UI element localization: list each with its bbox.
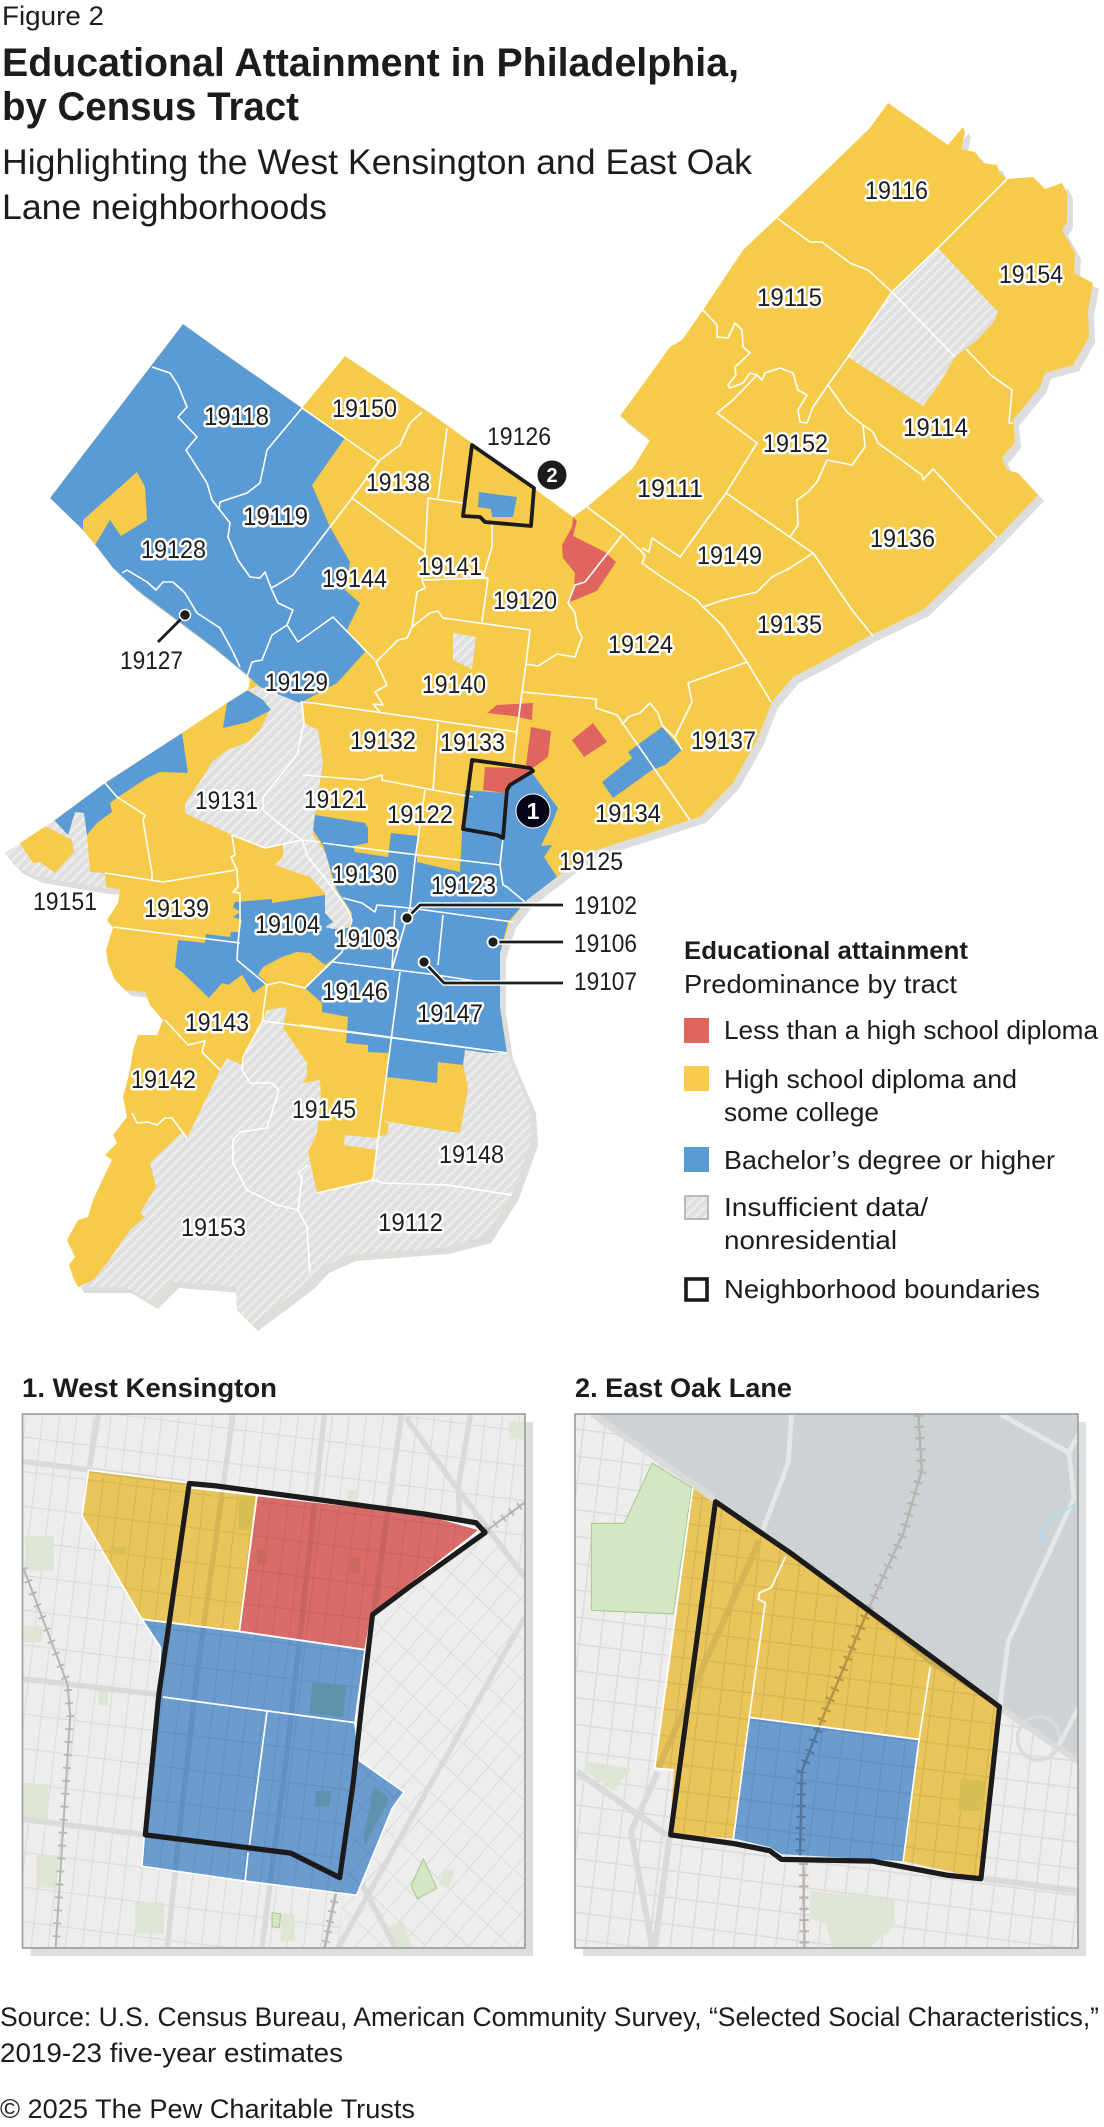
badge 2 [537,460,567,490]
ZIP code labels: 19119 [243,503,308,531]
inset tract: yellow [82,1470,257,1631]
tract fills clipped to the city [5,248,998,1325]
city base: high school diploma and some college tracts [5,103,1093,1325]
ZIP code labels: 19140 [422,671,486,699]
ZIP code labels: 19106 [574,930,637,958]
ZIP code labels: 19126 [487,423,551,451]
ZIP code labels [33,177,1063,1242]
neighborhood outline: East Oak Lane [463,445,534,526]
subtitle [2,143,753,227]
ZIP code labels: 19147 [417,1000,483,1028]
legend heading: Educational attainment [684,937,969,965]
ZIP code labels: 19122 [387,801,453,829]
tract boundaries [105,179,1013,1273]
figure number: Figure 2 [2,1,104,31]
less than a high school diploma tracts [483,517,616,793]
inset tract: yellow [655,1488,1000,1879]
ZIP code labels: 19111 [637,475,703,503]
ZIP code labels: 19143 [185,1009,249,1037]
ZIP code labels: 19137 [691,727,756,755]
source note: Source: U.S. Census Bureau, American Community Survey, “Selected Social Characteristics,” [0,2002,1099,2032]
yellow pocket in 19128 [83,472,147,545]
neighborhood outline: West Kensington [463,760,533,838]
legend item: high school [684,1064,1017,1127]
callout: 19102 [402,905,563,924]
inset neighborhood outline [145,1483,485,1878]
ZIP code labels: 19154 [999,261,1063,289]
ZIP code labels: 19129 [265,669,328,697]
ZIP code labels: 19115 [757,284,822,312]
bachelor's degree tracts [50,324,682,1083]
inset tracts: blue [142,1619,404,1895]
ZIP code labels: 19141 [418,553,482,581]
badge 1: 1 [527,798,540,824]
panel: West Kensington inset map [22,1414,533,1956]
ZIP code labels: 19153 [181,1214,246,1242]
legend [684,937,1099,1304]
ZIP code labels: 19149 [697,542,762,570]
ZIP code labels: 19151 [33,888,97,916]
legend item: insufficient data: Insufficient data/ [724,1192,929,1222]
legend subheading: Predominance by tract [684,969,958,999]
legend item: less than high school: Less than a high school diploma [724,1015,1099,1045]
title: by Census Tract [2,85,299,129]
ZIP code labels: 19123 [431,872,496,900]
ZIP code labels: 19120 [493,587,557,615]
ZIP code labels: 19142 [131,1066,196,1094]
ZIP code labels: 19148 [439,1141,504,1169]
ZIP code labels: 19104 [255,911,320,939]
ZIP code labels: 19135 [757,611,822,639]
legend item: high school: some college [724,1097,879,1127]
ZIP code labels: 19103 [335,925,398,953]
inset tract outlines [82,1470,480,1895]
ZIP code labels: 19114 [903,414,968,442]
title [2,41,739,129]
ZIP code labels: 19112 [378,1209,443,1237]
inset tract: blue [733,1717,919,1861]
ZIP code labels: 19132 [350,727,416,755]
ZIP code labels: 19134 [595,800,661,828]
callout: 19106 [488,936,563,948]
ZIP code labels: 19138 [366,469,430,497]
ZIP code labels: 19133 [440,729,505,757]
ZIP code labels: 19144 [322,565,387,593]
ZIP code labels: 19136 [870,525,935,553]
ZIP code labels: 19116 [865,177,928,205]
legend item: bachelor's degree: Bachelor’s degree or higher [724,1145,1055,1175]
ZIP code labels: 19131 [195,787,258,815]
ZIP code labels: 19121 [304,786,367,814]
ZIP code labels: 19130 [332,861,397,889]
subtitle: Lane neighborhoods [2,188,327,227]
ZIP code labels: 19139 [144,895,209,923]
legend item: high school: High school diploma and [724,1064,1017,1094]
legend item: insufficient data [685,1192,929,1255]
yellow tract on the far west edge [20,826,74,873]
ZIP code labels: 19107 [574,968,637,996]
callout: 19107 [418,956,563,983]
badge 2: 2 [546,465,558,487]
badge 1 [516,794,550,828]
inset neighborhood outline [671,1502,1000,1879]
panel: East Oak Lane inset map [575,1414,1086,1956]
source note [0,2002,1099,2068]
ZIP code labels: 19128 [141,536,206,564]
title: Educational Attainment in Philadelphia, [2,41,739,85]
ZIP code labels: 19150 [332,395,397,423]
insufficient data areas [5,248,998,1325]
ZIP code labels: 19102 [574,892,637,920]
ZIP code labels: 19146 [322,978,388,1006]
inset tract: red [239,1495,480,1650]
choropleth map of Philadelphia [5,103,1099,1331]
inset park [591,1463,692,1614]
legend item: insufficient data: nonresidential [724,1225,897,1255]
panel heading: East Oak Lane: 2. East Oak Lane [575,1373,792,1403]
ZIP code labels: 19124 [608,631,673,659]
panel heading: West Kensington: 1. West Kensington [22,1373,277,1403]
source note: 2019-23 five-year estimates [0,2038,343,2068]
copyright: © 2025 The Pew Charitable Trusts [0,2094,415,2124]
ZIP code labels: 19127 [120,647,183,675]
map drop shadow [11,109,1099,1331]
inset tract outlines [655,1488,930,1861]
subtitle: Highlighting the West Kensington and East Oak [2,143,753,182]
callout: 19127 [158,610,190,642]
ZIP code labels: 19125 [559,848,623,876]
ZIP code labels: 19118 [204,403,269,431]
legend item: neighborhood boundaries: Neighborhood boundaries [724,1274,1040,1304]
ZIP code labels: 19145 [292,1096,356,1124]
ZIP code labels: 19152 [763,430,828,458]
